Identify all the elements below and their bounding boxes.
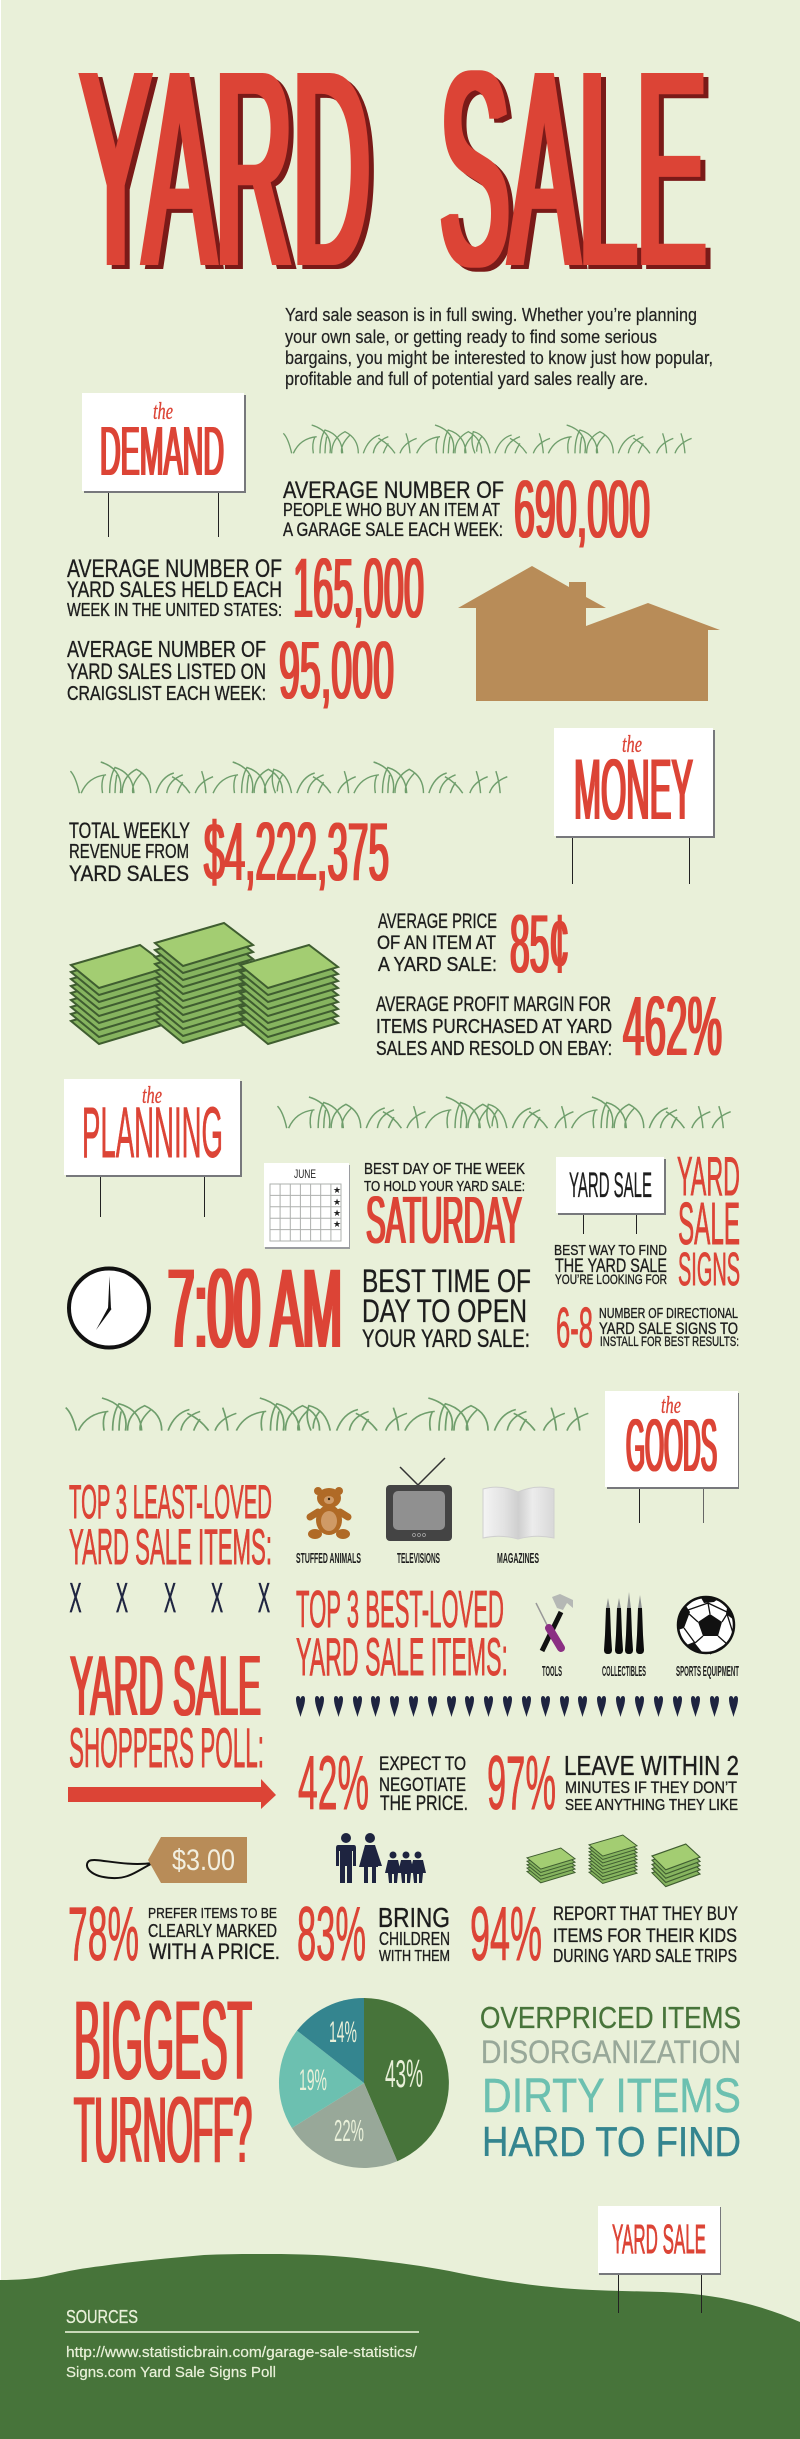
grass divider: [66, 1398, 588, 1431]
pie chart: 14%: [329, 2016, 357, 2049]
sources: SOURCES: [66, 2307, 138, 2327]
intro text: Yard sale season is in full swing. Whether you’re planning: [285, 305, 697, 325]
stat: 97 percent: MINUTES IF THEY DON’T: [565, 1778, 737, 1797]
stat: yard sales per week: [67, 541, 424, 635]
stat: 78 percent: WITH A PRICE.: [149, 1939, 280, 1964]
text: PLANNING: [82, 1094, 223, 1173]
sign: small yard sale: [556, 1157, 666, 1234]
labels: best-loved items: TOOLS: [542, 1663, 562, 1680]
text: YARD SALE ITEMS:: [296, 1628, 508, 1687]
pie chart: 43%: [385, 2053, 423, 2096]
stat: weekly revenue: [69, 805, 389, 898]
heading: shoppers poll: [69, 1639, 264, 1779]
stat: yard sales per week: YARD SALES HELD EACH: [67, 577, 282, 602]
heading: biggest turnoff: [74, 1978, 252, 2182]
icon: calendar: ★: [333, 1197, 341, 1207]
row of x marks: X: [211, 1574, 223, 1621]
sources: [65, 2307, 419, 2381]
stat: 83 percent: BRING: [378, 1902, 450, 1933]
icon: family: [336, 1833, 426, 1883]
sign: the goods: [605, 1391, 739, 1523]
sources: http://www.statisticbrain.com/garage-sale-statistics/: [66, 2344, 418, 2361]
stat: weekly revenue: YARD SALES: [69, 861, 189, 886]
icon: price tag: [87, 1837, 247, 1883]
grass divider: [283, 425, 692, 453]
row of x marks: [70, 1574, 270, 1621]
sign: the demand: [82, 393, 246, 537]
icon: stacks of money: [71, 923, 338, 1044]
sign: small yard sale: YARD SALE: [569, 1166, 652, 1205]
icon: soccer ball: [676, 1596, 736, 1656]
stat: 97 percent: SEE ANYTHING THEY LIKE: [565, 1797, 738, 1814]
pie chart: [279, 1998, 449, 2168]
stat: directional signs: [556, 1296, 739, 1360]
stat: garage sale buyers: A GARAGE SALE EACH WEEK:: [283, 520, 503, 541]
stat: 42 percent: 42%: [298, 1741, 369, 1826]
stat: yard sales per week: WEEK IN THE UNITED STATES:: [67, 600, 282, 620]
icon: calendar: JUNE: [294, 1167, 316, 1181]
stat: garage sale buyers: PEOPLE WHO BUY AN ITEM AT: [283, 500, 500, 520]
text: DEMAND: [100, 412, 224, 490]
icon: price tag: $3.00: [172, 1844, 235, 1877]
stat: best time: YOUR YARD SALE:: [362, 1325, 530, 1353]
intro text: your own sale, or getting ready to find some serious: [285, 327, 657, 347]
stat: 42 percent: EXPECT TO: [379, 1754, 466, 1775]
intro text: profitable and full of potential yard sales really are.: [285, 369, 648, 389]
pie chart: 22%: [334, 2113, 364, 2148]
text: MAGAZINES: [497, 1550, 539, 1567]
stat: 94 percent: REPORT THAT THEY BUY: [553, 1904, 738, 1925]
text: SHOPPERS POLL:: [69, 1716, 264, 1779]
row of x marks: X: [164, 1574, 176, 1621]
stat: average price: OF AN ITEM AT: [377, 933, 496, 954]
pie legend: HARD TO FIND: [482, 2118, 741, 2165]
stat: average price: A YARD SALE:: [378, 954, 497, 976]
stat: 78 percent: PREFER ITEMS TO BE: [148, 1905, 277, 1922]
row of x marks: X: [116, 1574, 128, 1621]
stat: 97 percent: LEAVE WITHIN 2: [564, 1750, 739, 1781]
stat: 83 percent: WITH THEM: [379, 1948, 450, 1965]
text: 85¢: [510, 897, 569, 990]
sign: the planning: [64, 1079, 242, 1217]
text: $4,222,375: [204, 805, 389, 898]
pie legend: OVERPRICED ITEMS: [480, 2001, 741, 2035]
icon: teddy bear: [308, 1487, 350, 1539]
icon: magazine: [483, 1487, 554, 1539]
sign: the money: the: [622, 732, 642, 758]
text: 165,000: [293, 541, 424, 635]
sign: the money: [554, 728, 715, 884]
text: BIGGEST: [74, 1978, 252, 2103]
stat: best time: BEST TIME OF: [362, 1263, 531, 1299]
pie legend: [480, 2001, 741, 2165]
icon: calendar: ★: [333, 1208, 341, 1218]
icon: calendar: ★: [333, 1219, 341, 1229]
stat: directional signs: NUMBER OF DIRECTIONAL: [599, 1306, 738, 1322]
stat: directional signs: 6-8: [556, 1296, 593, 1360]
icon: calendar: [264, 1163, 350, 1249]
labels: best-loved items: COLLECTIBLES: [602, 1663, 646, 1680]
stat: garage sale buyers: AVERAGE NUMBER OF: [283, 477, 504, 504]
stat: weekly revenue: TOTAL WEEKLY: [69, 818, 190, 843]
stat: best day: BEST DAY OF THE WEEK: [364, 1161, 525, 1178]
stat: craigslist listings: AVERAGE NUMBER OF: [67, 636, 266, 662]
stat: average price: AVERAGE PRICE: [378, 910, 497, 933]
text: YARD SALE ITEMS:: [69, 1519, 272, 1575]
sign: the planning: the: [142, 1083, 162, 1109]
stat: yard sale signs: THE YARD SALE: [555, 1256, 667, 1277]
stat: best day: TO HOLD YOUR YARD SALE:: [364, 1178, 525, 1195]
stat: craigslist listings: YARD SALES LISTED ON: [67, 659, 266, 684]
sign: the goods: the: [661, 1393, 681, 1419]
pie legend: DISORGANIZATION: [481, 2034, 741, 2070]
sign: the demand: the: [153, 399, 173, 425]
row of hearts: [296, 1696, 738, 1717]
stat: 83 percent: CHILDREN: [379, 1929, 450, 1949]
stat: best day: [364, 1161, 525, 1258]
stat: average price: [377, 897, 569, 990]
green hill: [0, 2254, 800, 2439]
stat: 94 percent: ITEMS FOR THEIR KIDS: [553, 1926, 737, 1947]
icon: collectibles: [604, 1592, 644, 1654]
icon: small money stacks: [527, 1835, 700, 1887]
stat: best time: DAY TO OPEN: [362, 1293, 527, 1329]
sign: bottom yard sale: [598, 2206, 721, 2313]
stat: yard sale signs: BEST WAY TO FIND: [554, 1242, 667, 1259]
stat: 83 percent: 83%: [297, 1892, 366, 1977]
labels: best-loved items: [542, 1663, 739, 1680]
stat: weekly revenue: REVENUE FROM: [69, 841, 189, 863]
intro text: [285, 305, 713, 389]
stat: profit margin: SALES AND RESOLD ON EBAY:: [376, 1038, 612, 1060]
stat: yard sales per week: AVERAGE NUMBER OF: [67, 555, 282, 583]
stat: 97 percent: [487, 1741, 739, 1826]
icon: house: [458, 566, 720, 701]
stat: craigslist listings: [67, 625, 394, 716]
pie legend: DIRTY ITEMS: [482, 2070, 741, 2123]
stat: profit margin: [376, 979, 722, 1073]
stat: yard sale signs: YOU’RE LOOKING FOR: [555, 1271, 667, 1287]
text: X: [258, 1574, 270, 1621]
icon: clock: [69, 1268, 149, 1348]
text: TOP 3 BEST-LOVED: [296, 1581, 504, 1639]
intro text: bargains, you might be interested to know just how popular,: [285, 348, 713, 368]
heading: best-loved items: [296, 1581, 508, 1687]
stat: 94 percent: DURING YARD SALE TRIPS: [553, 1946, 737, 1966]
stat: directional signs: INSTALL FOR BEST RESULTS:: [600, 1334, 739, 1349]
text: TOP 3 LEAST-LOVED: [69, 1475, 272, 1528]
stat: garage sale buyers: [283, 464, 650, 555]
row of x marks: X: [70, 1574, 82, 1621]
icon: television: [386, 1458, 452, 1541]
sources: Signs.com Yard Sale Signs Poll: [66, 2364, 276, 2381]
icon: tools: [536, 1594, 573, 1651]
stat: 94 percent: 94%: [470, 1892, 542, 1977]
stat: 42 percent: NEGOTIATE: [379, 1775, 466, 1796]
stat: 78 percent: 78%: [68, 1892, 139, 1977]
icon: calendar: ★: [333, 1185, 341, 1195]
labels: least-loved items: TELEVISIONS: [397, 1550, 440, 1567]
stat: best time: 7:00 AM: [168, 1246, 342, 1371]
text: YARD SALE: [70, 1639, 261, 1734]
stat: profit margin: AVERAGE PROFIT MARGIN FOR: [376, 993, 611, 1016]
stat: craigslist listings: CRAIGSLIST EACH WEEK:: [67, 683, 266, 705]
stat: 78 percent: CLEARLY MARKED: [148, 1921, 277, 1941]
labels: least-loved items: [296, 1550, 539, 1567]
stat: 97 percent: 97%: [487, 1741, 556, 1826]
stat: 94 percent: [470, 1892, 738, 1977]
stat: 42 percent: THE PRICE.: [380, 1792, 468, 1815]
text: 95,000: [279, 625, 394, 716]
stat: yard sale signs: [554, 1145, 740, 1295]
text: SATURDAY: [366, 1183, 522, 1258]
stat: profit margin: ITEMS PURCHASED AT YARD: [376, 1016, 612, 1038]
grass divider: [277, 1097, 731, 1128]
grass divider: [70, 762, 507, 793]
heading: least-loved items: [69, 1475, 272, 1575]
stat: directional signs: YARD SALE SIGNS TO: [599, 1319, 738, 1338]
text: TURNOFF?: [74, 2077, 252, 2182]
arrow: [68, 1779, 276, 1809]
pie chart: 19%: [299, 2064, 327, 2097]
labels: least-loved items: STUFFED ANIMALS: [296, 1550, 361, 1567]
